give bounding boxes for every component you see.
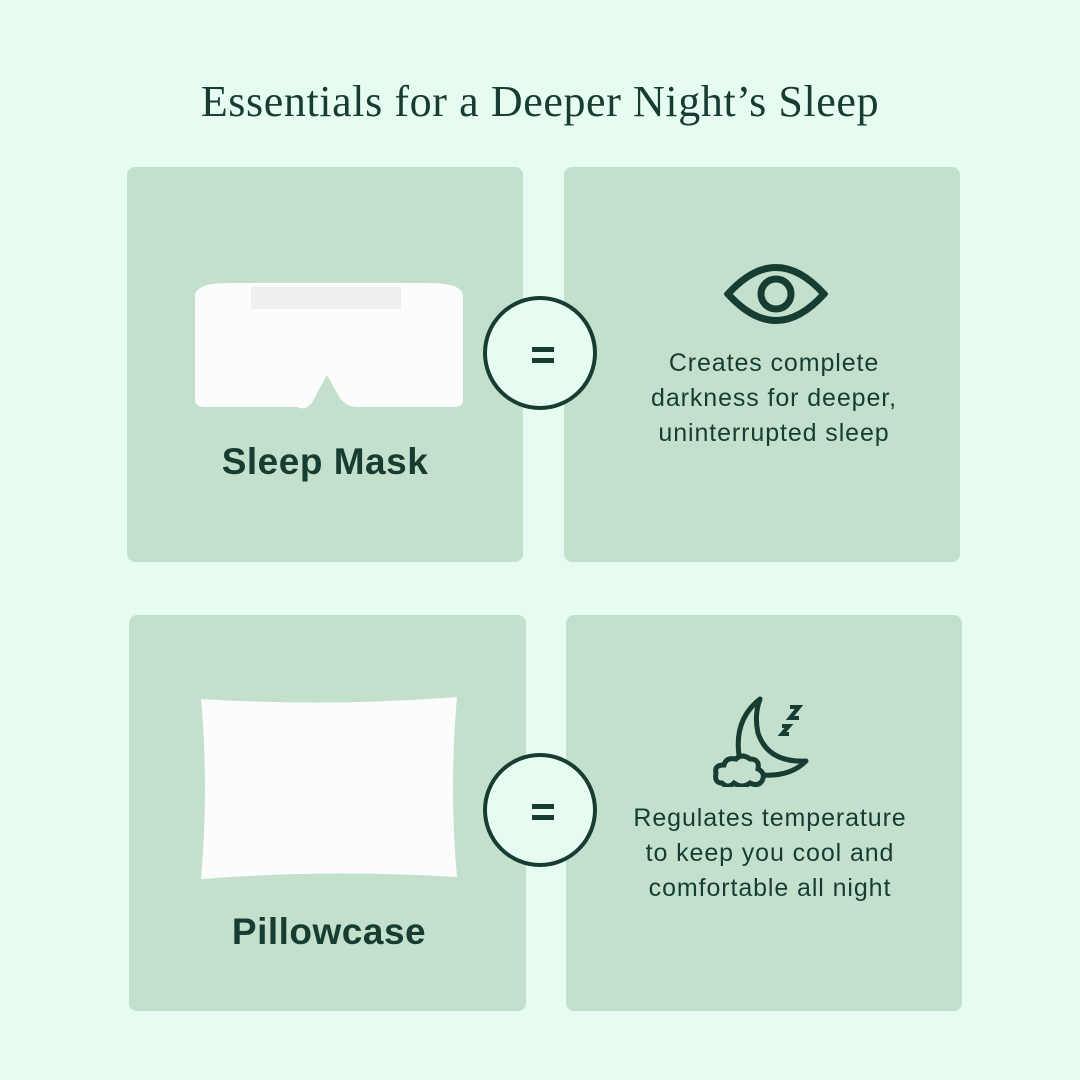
image: sleep mask xyxy=(195,283,463,408)
equals 2 xyxy=(483,753,597,867)
text: Regulates temperature xyxy=(633,804,907,832)
equals 1 xyxy=(483,296,597,410)
panel: pillow benefit xyxy=(566,615,962,1011)
text xyxy=(633,804,907,902)
image: pillow xyxy=(201,697,457,879)
text: uninterrupted sleep xyxy=(658,419,890,447)
label: Sleep Mask xyxy=(222,441,428,482)
text xyxy=(651,349,897,447)
title: Essentials for a Deeper Night’s Sleep xyxy=(201,77,879,126)
icon: moon cloud xyxy=(713,696,808,787)
text: darkness for deeper, xyxy=(651,384,897,412)
panel: mask benefit xyxy=(564,167,960,562)
text: comfortable all night xyxy=(649,874,891,902)
panel: pillowcase xyxy=(129,615,526,1011)
icon: eye xyxy=(724,264,828,324)
text: Creates complete xyxy=(669,349,879,377)
text: to keep you cool and xyxy=(646,839,894,867)
label: Pillowcase xyxy=(232,911,426,952)
panel: sleep mask xyxy=(127,167,523,562)
